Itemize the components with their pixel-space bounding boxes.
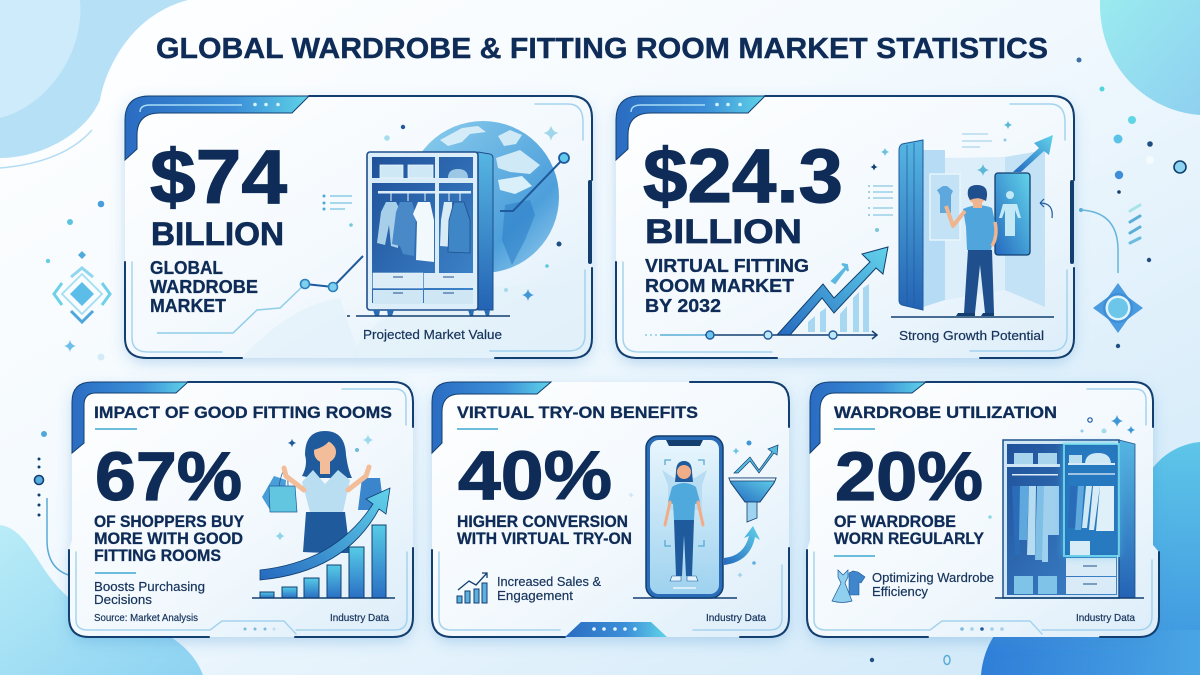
label: higher conversion: HIGHER CONVERSION [457, 513, 628, 531]
label: global wardrobe market: MARKET [150, 296, 226, 316]
accent line [95, 428, 137, 430]
panel frame [125, 96, 592, 358]
panel frame [807, 382, 1159, 637]
label: higher conversion [457, 513, 632, 548]
chart: line through globe [500, 153, 569, 211]
icon: wardrobe [347, 152, 510, 316]
heading: VIRTUAL TRY-ON BENEFITS [457, 403, 698, 422]
label: virtual fitting room market by 2032: BY 2032 [645, 296, 721, 316]
icon: globe [407, 121, 559, 273]
note: optimizing wardrobe efficiency: Optimizing Wardrobe [872, 570, 994, 585]
label: of wardrobe worn regularly: WORN REGULARLY [834, 530, 984, 548]
note: optimizing wardrobe efficiency: Efficiency [872, 584, 928, 599]
icon: compass emblem [1093, 283, 1143, 333]
label: of wardrobe worn regularly [834, 513, 984, 548]
stat: 67%: 67% [95, 438, 242, 515]
accent line [834, 555, 875, 557]
note: boosts purchasing decisions: Boosts Purchasing [94, 579, 205, 594]
icon: dress and shirt [832, 570, 865, 602]
stat unit: billion: BILLION [151, 216, 284, 252]
caption: strong growth potential: Strong Growth Potential [899, 329, 1044, 343]
panel frame [69, 382, 413, 637]
label: virtual fitting room market by 2032: ROOM MARKET [645, 276, 794, 296]
chart: growth bars [808, 284, 869, 332]
label: of shoppers buy more [94, 513, 244, 565]
arrow: funnel trend [734, 445, 778, 473]
note: optimizing wardrobe efficiency [872, 570, 994, 599]
panel: wardrobe utilization [807, 382, 1159, 637]
note: boosts purchasing decisions [94, 579, 205, 607]
label: global wardrobe market [150, 258, 258, 316]
label: of shoppers buy more: FITTING ROOMS [94, 547, 221, 565]
icon: virtual fitting room [891, 135, 1054, 317]
chart: bars with rising arrow [252, 488, 395, 598]
note: increased sales and engagement: Increased Sales & [497, 574, 601, 589]
label: of shoppers buy more: OF SHOPPERS BUY [94, 513, 244, 531]
icon: woman with shopping bags [262, 431, 384, 553]
chart: timeline [645, 331, 877, 339]
label: global wardrobe market: WARDROBE [150, 277, 258, 297]
source tag: Industry Data [330, 612, 389, 624]
arrow: curved to funnel [724, 526, 760, 565]
icon: sparkles [988, 415, 1135, 519]
icon: phone with try-on figure [633, 436, 737, 598]
icon: diamond emblem [54, 268, 110, 322]
icon: sparkles and list [322, 125, 562, 301]
label: global wardrobe market: GLOBAL [150, 258, 223, 278]
stat: $74: $74 [150, 135, 287, 220]
arrow: growth [777, 247, 888, 335]
panel: virtual try-on benefits [432, 382, 789, 637]
icon: mini bar chart [457, 573, 487, 603]
panel: virtual fitting room market [616, 96, 1074, 358]
note: boosts purchasing decisions: Decisions [94, 592, 153, 607]
stat: 20%: 20% [835, 438, 983, 515]
stat: $24.3: $24.3 [643, 134, 843, 219]
label: of wardrobe worn regularly: OF WARDROBE [834, 513, 956, 531]
source tag: Industry Data [706, 612, 766, 624]
label: virtual fitting room market by 2032 [645, 256, 809, 316]
title: GLOBAL WARDROBE & FITTING ROOM MARKET STATISTICS [156, 33, 1048, 65]
chart: rising line [157, 256, 363, 333]
panel: impact of good fitting rooms [69, 382, 413, 637]
arrow: small growth [832, 264, 848, 283]
note: increased sales and engagement: Engagement [497, 588, 573, 603]
icon: wardrobe with highlighted section [995, 440, 1144, 598]
caption: projected market value: Projected Market Value [363, 328, 502, 342]
stat: 40%: 40% [458, 437, 612, 514]
heading: WARDROBE UTILIZATION [834, 403, 1057, 422]
note: increased sales and engagement [497, 574, 601, 603]
heading: IMPACT OF GOOD FITTING ROOMS [94, 403, 392, 422]
stat unit: billion: BILLION [645, 213, 802, 251]
label: of shoppers buy more: MORE WITH GOOD [94, 530, 243, 548]
icon: sparkles and lists [868, 121, 1052, 232]
icon: funnel [729, 478, 776, 522]
panel: global wardrobe market [125, 96, 592, 358]
accent line [834, 428, 875, 430]
source tag: Industry Data [1076, 612, 1135, 624]
accent line [95, 572, 136, 574]
panel frame [616, 96, 1074, 358]
accent line [457, 428, 498, 430]
panel frame [432, 382, 789, 637]
label: higher conversion: WITH VIRTUAL TRY-ON [457, 530, 632, 548]
label: virtual fitting room market by 2032: VIRTUAL FITTING [645, 256, 809, 276]
icon: sparkles [628, 440, 756, 578]
source: Source: Market Analysis [94, 612, 198, 624]
